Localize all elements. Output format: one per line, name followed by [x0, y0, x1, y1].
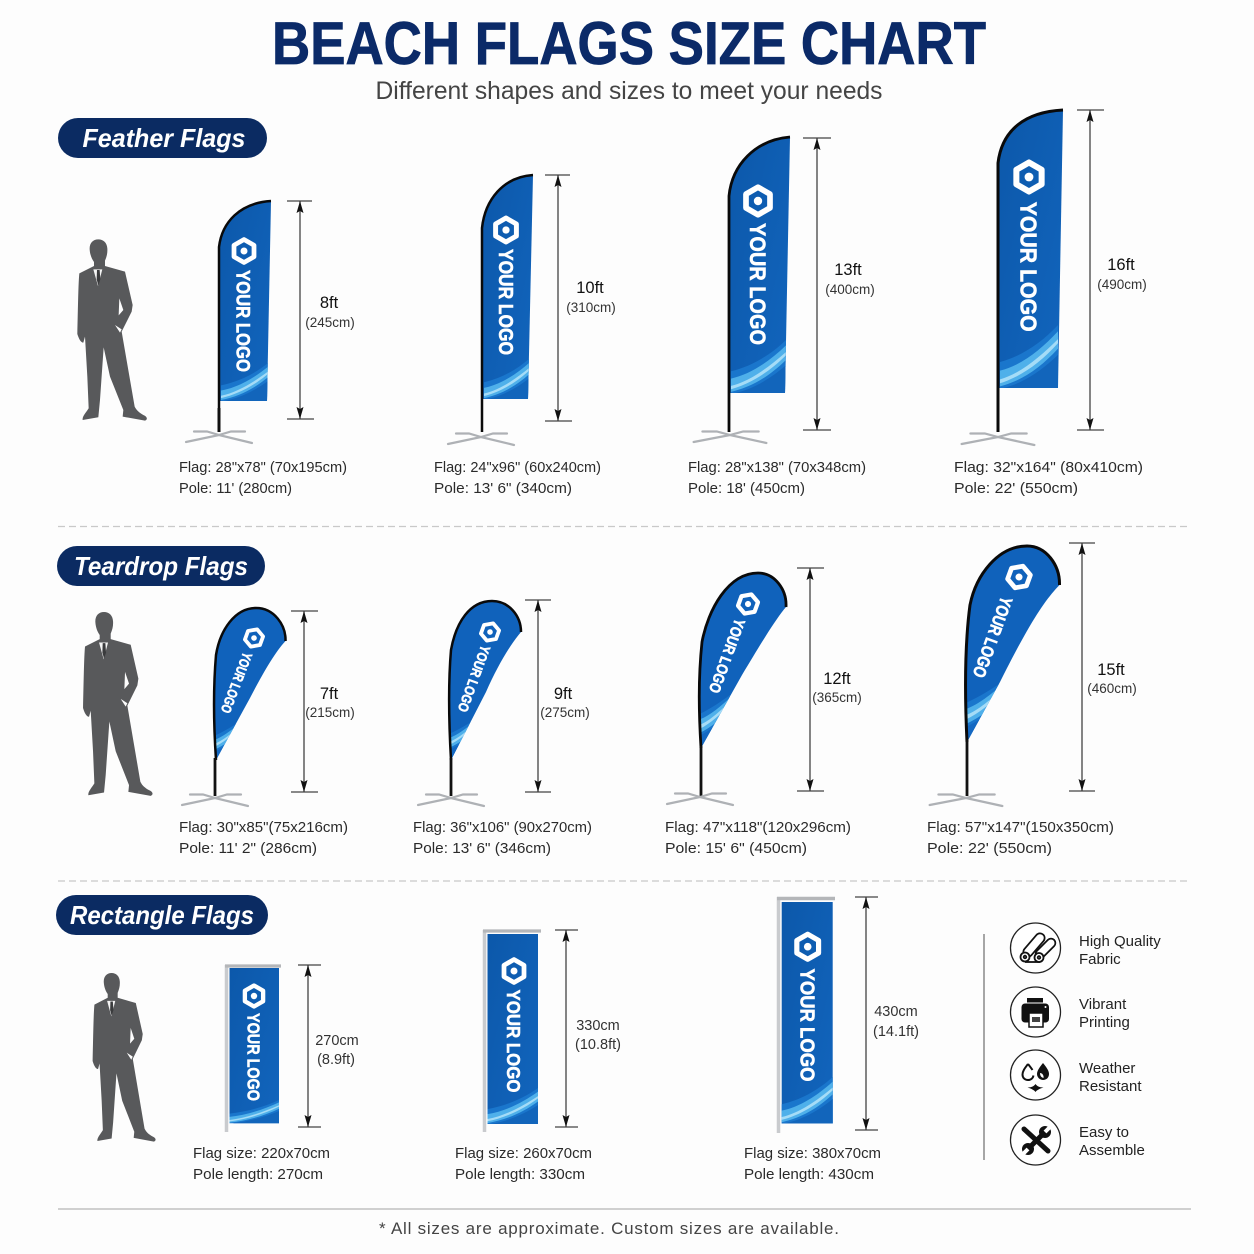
flag: teardrop 7ft: YOUR LOGO	[218, 650, 256, 716]
spec: rectangle 270cm: Flag size: 220x70cm	[193, 1146, 330, 1162]
spec: feather 16ft: Pole: 22' (550cm)	[954, 481, 1078, 497]
dimension: 8ft	[287, 201, 355, 419]
spec: feather 10ft: Pole: 13' 6" (340cm)	[434, 481, 572, 497]
label: weather resistant: Resistant	[1079, 1078, 1142, 1095]
heading: feather flags: Feather Flags	[82, 123, 246, 153]
heading: rectangle flags: Rectangle Flags	[70, 900, 254, 930]
spec: feather 13ft: Pole: 18' (450cm)	[688, 481, 805, 497]
dimension: 10ft: 10ft	[576, 279, 604, 297]
dimension: 12ft: 12ft	[823, 670, 851, 688]
dimension: 16ft: (490cm)	[1097, 277, 1147, 292]
spec: teardrop 9ft: Pole: 13' 6" (346cm)	[413, 841, 551, 857]
heading: feather flags	[58, 118, 267, 158]
label: easy to assemble: Assemble	[1079, 1142, 1145, 1159]
dimension: 330cm	[555, 930, 621, 1127]
dimension: 430cm: (14.1ft)	[873, 1024, 919, 1040]
spec: teardrop 7ft: Flag: 30"x85"(75x216cm)	[179, 820, 348, 836]
dimension: 7ft: 7ft	[320, 685, 339, 703]
spec: teardrop 15ft: Pole: 22' (550cm)	[927, 841, 1052, 857]
flag: feather 8ft	[186, 201, 271, 443]
heading: teardrop flags	[57, 546, 265, 586]
dimension: 15ft	[1069, 543, 1137, 791]
dimension: 270cm: (8.9ft)	[317, 1052, 355, 1068]
spec: rectangle 430cm: Pole length: 430cm	[744, 1167, 874, 1183]
spec: feather 10ft	[434, 460, 601, 497]
label: high quality fabric	[1079, 933, 1161, 968]
spec: rectangle 430cm	[744, 1146, 881, 1183]
spec: teardrop 7ft	[179, 820, 348, 857]
flag: feather 16ft: YOUR LOGO	[1015, 202, 1041, 332]
flag: teardrop 9ft: YOUR LOGO	[455, 643, 494, 714]
panel: rectangle flags	[56, 895, 919, 1183]
label: vibrant printing: Printing	[1079, 1014, 1130, 1031]
spec: feather 13ft: Flag: 28"x138" (70x348cm)	[688, 460, 866, 476]
flag: rectangle 330cm	[483, 930, 541, 1132]
label: high quality fabric: High Quality	[1079, 933, 1161, 950]
dimension: 9ft	[525, 600, 590, 792]
spec: teardrop 9ft: Flag: 36"x106" (90x270cm)	[413, 820, 592, 836]
spec: rectangle 330cm	[455, 1146, 592, 1183]
flag: feather 13ft	[694, 137, 790, 443]
label: weather resistant	[1079, 1060, 1142, 1095]
label: weather resistant: Weather	[1079, 1060, 1135, 1077]
dimension: 13ft	[803, 138, 875, 430]
spec: teardrop 12ft: Flag: 47"x118"(120x296cm)	[665, 820, 851, 836]
heading: rectangle flags	[56, 895, 268, 935]
flag: rectangle 330cm: YOUR LOGO	[503, 990, 524, 1092]
spec: rectangle 430cm: Flag size: 380x70cm	[744, 1146, 881, 1162]
icon: printer	[1010, 987, 1060, 1037]
spec: teardrop 7ft: Pole: 11' 2" (286cm)	[179, 841, 317, 857]
flag: teardrop 12ft: YOUR LOGO	[705, 616, 748, 695]
dimension: 10ft	[545, 175, 616, 421]
dimension: 15ft: (460cm)	[1087, 681, 1137, 696]
spec: teardrop 9ft	[413, 820, 592, 857]
dimension: 270cm: 270cm	[315, 1033, 359, 1049]
panel: features	[1010, 923, 1161, 1165]
flag: teardrop 7ft	[182, 608, 286, 806]
dimension: 8ft: 8ft	[320, 294, 339, 312]
label: easy to assemble: Easy to	[1079, 1124, 1129, 1141]
flag: feather 10ft	[448, 175, 533, 445]
spec: rectangle 330cm: Pole length: 330cm	[455, 1167, 585, 1183]
spec: rectangle 270cm: Pole length: 270cm	[193, 1167, 323, 1183]
flag: feather 10ft: YOUR LOGO	[494, 249, 516, 355]
title: BEACH FLAGS SIZE CHART	[272, 10, 986, 77]
label: vibrant printing	[1079, 996, 1130, 1031]
label: easy to assemble	[1079, 1124, 1145, 1159]
dimension: 16ft	[1077, 110, 1147, 430]
flag: teardrop 9ft	[418, 601, 521, 806]
spec: rectangle 270cm	[193, 1146, 330, 1183]
dimension: 330cm: 330cm	[576, 1018, 620, 1034]
dimension: 7ft: (215cm)	[305, 705, 355, 720]
spec: rectangle 330cm: Flag size: 260x70cm	[455, 1146, 592, 1162]
dimension: 15ft: 15ft	[1097, 661, 1125, 679]
dimension: 8ft: (245cm)	[305, 315, 355, 330]
spec: teardrop 15ft: Flag: 57"x147"(150x350cm)	[927, 820, 1114, 836]
flag: teardrop 15ft: YOUR LOGO	[969, 594, 1017, 680]
spec: feather 8ft: Flag: 28"x78" (70x195cm)	[179, 460, 347, 476]
dimension: 13ft: 13ft	[834, 261, 862, 279]
dimension: 16ft: 16ft	[1107, 256, 1135, 274]
panel: feather flags	[58, 110, 1147, 497]
icon: tools	[1010, 1115, 1060, 1165]
spec: feather 8ft: Pole: 11' (280cm)	[179, 481, 292, 497]
dimension: 12ft: (365cm)	[812, 690, 862, 705]
human silhouette	[83, 612, 153, 796]
footnote: * All sizes are approximate. Custom sizes are available.	[379, 1219, 839, 1238]
dimension: 7ft	[291, 611, 355, 792]
dimension: 9ft: 9ft	[554, 685, 573, 703]
flag: teardrop 12ft	[667, 573, 786, 805]
flag: rectangle 270cm: YOUR LOGO	[244, 1013, 264, 1101]
human silhouette	[93, 973, 156, 1142]
dimension: 10ft: (310cm)	[566, 300, 616, 315]
dimension: 9ft: (275cm)	[540, 705, 590, 720]
dimension: 12ft	[797, 568, 862, 791]
flag: teardrop 15ft	[930, 546, 1060, 806]
human silhouette	[77, 239, 147, 421]
label: high quality fabric: Fabric	[1079, 951, 1121, 968]
dimension: 13ft: (400cm)	[825, 282, 875, 297]
spec: teardrop 12ft: Pole: 15' 6" (450cm)	[665, 841, 807, 857]
icon: fabric rolls	[1010, 923, 1060, 973]
icon: water drops	[1010, 1050, 1060, 1100]
flag: rectangle 430cm	[777, 897, 835, 1133]
dimension: 270cm	[298, 965, 359, 1127]
spec: teardrop 15ft	[927, 820, 1114, 857]
spec: feather 10ft: Flag: 24"x96" (60x240cm)	[434, 460, 601, 476]
spec: feather 16ft: Flag: 32"x164" (80x410cm)	[954, 460, 1143, 476]
flag: rectangle 430cm: YOUR LOGO	[795, 968, 817, 1082]
flag: feather 8ft: YOUR LOGO	[232, 270, 254, 372]
spec: feather 13ft	[688, 460, 866, 497]
dimension: 430cm: 430cm	[874, 1004, 918, 1020]
dimension: 330cm: (10.8ft)	[575, 1037, 621, 1053]
heading: teardrop flags: Teardrop Flags	[74, 551, 248, 581]
flag: feather 16ft	[962, 110, 1063, 445]
flag: rectangle 270cm	[225, 965, 281, 1132]
flag: feather 13ft: YOUR LOGO	[745, 223, 770, 345]
spec: feather 16ft	[954, 460, 1143, 497]
spec: teardrop 12ft	[665, 820, 851, 857]
panel: teardrop flags	[57, 543, 1137, 857]
label: vibrant printing: Vibrant	[1079, 996, 1127, 1013]
subtitle: Different shapes and sizes to meet your needs	[376, 77, 882, 105]
spec: feather 8ft	[179, 460, 347, 497]
dimension: 430cm	[855, 897, 919, 1130]
